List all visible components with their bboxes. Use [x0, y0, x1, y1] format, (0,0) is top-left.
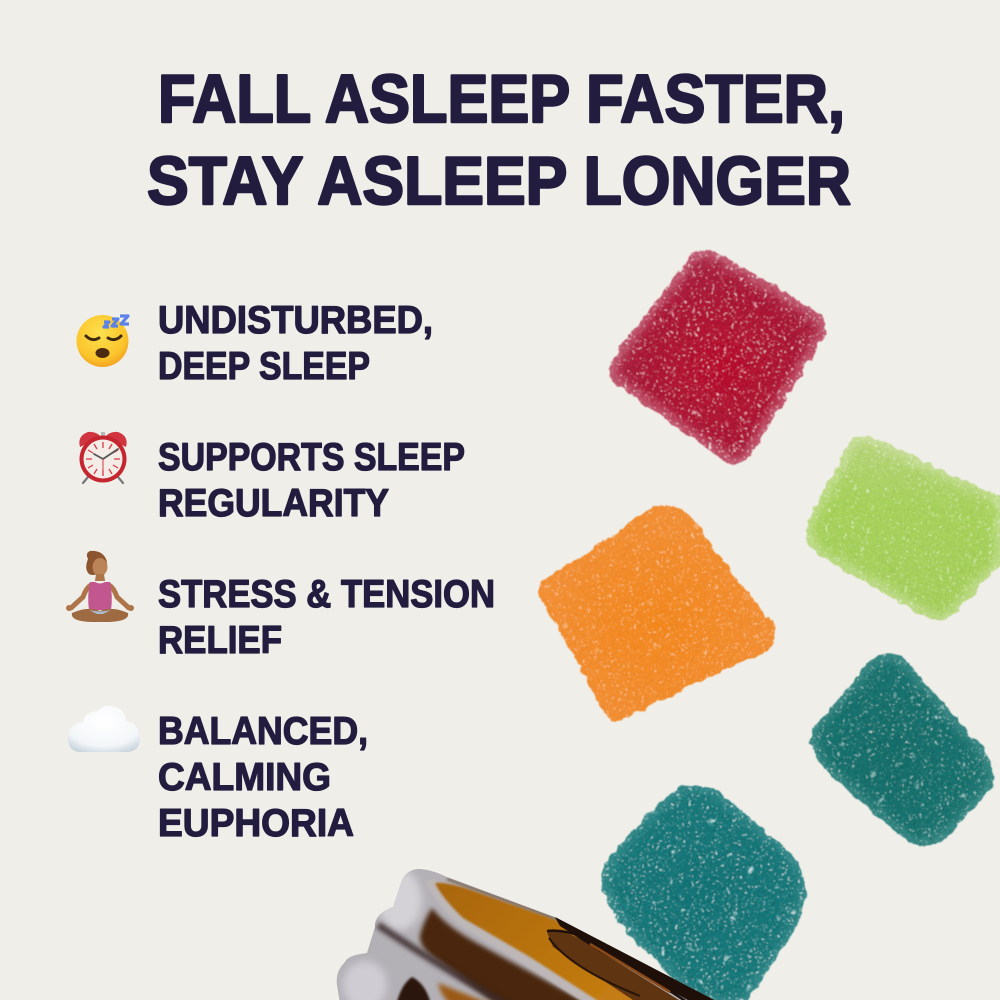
benefit: balanced, calming euphoria: EUPHORIA — [158, 802, 354, 845]
gummy: teal lower — [602, 785, 806, 1000]
top rim edge: streak — [590, 944, 670, 992]
top rim edge: dark glass — [554, 917, 714, 1000]
jar rim: pale band — [427, 881, 594, 1000]
benefit: balanced, calming euphoria: CALMING — [158, 756, 331, 799]
amber interior — [435, 883, 652, 1000]
title: FALL ASLEEP FASTER, — [158, 61, 845, 137]
icon: alarm clock — [79, 432, 127, 483]
benefit: supports sleep regularity: REGULARITY — [158, 482, 389, 525]
benefit: supports sleep regularity — [158, 436, 465, 525]
inner glass dark line: upper — [547, 931, 690, 1000]
icon: person meditating — [66, 551, 134, 622]
amber glass jar — [336, 869, 714, 1000]
gummy: orange — [538, 506, 775, 721]
jar base: amber reflection — [438, 983, 505, 1000]
benefit: undisturbed, deep sleep: DEEP SLEEP — [158, 345, 370, 388]
benefit: supports sleep regularity: SUPPORTS SLEEP — [158, 436, 465, 479]
jar highlight: upper shoulder — [378, 870, 422, 930]
benefit: undisturbed, deep sleep — [158, 299, 433, 388]
jar neck groove — [378, 925, 507, 1000]
benefit: stress and tension relief: RELIEF — [158, 619, 282, 662]
top rim edge: upper shadow line — [447, 879, 557, 919]
inner glass wall — [547, 932, 679, 1000]
inner glass dark line: lower — [549, 938, 640, 996]
gummy: green — [806, 436, 1000, 620]
gummy: red — [609, 250, 826, 464]
title — [147, 61, 851, 219]
jar neck: brown glass band — [420, 908, 600, 1000]
title: STAY ASLEEP LONGER — [147, 143, 851, 219]
benefit list — [66, 299, 495, 845]
benefit: undisturbed, deep sleep: UNDISTURBED, — [158, 299, 433, 342]
benefit: balanced, calming euphoria — [158, 710, 368, 845]
icon: cloud — [68, 706, 140, 752]
icon: sleeping face — [76, 315, 129, 367]
benefit: balanced, calming euphoria: BALANCED, — [158, 710, 368, 753]
benefit: stress and tension relief — [158, 573, 495, 662]
jar body: frosted silhouette — [336, 869, 714, 1000]
gummy: teal upper — [810, 654, 994, 846]
benefit: stress and tension relief: STRESS & TENSION — [158, 573, 495, 616]
jar highlight: lower shoulder — [343, 961, 387, 1000]
jar base: lower dark glass — [395, 977, 432, 1000]
